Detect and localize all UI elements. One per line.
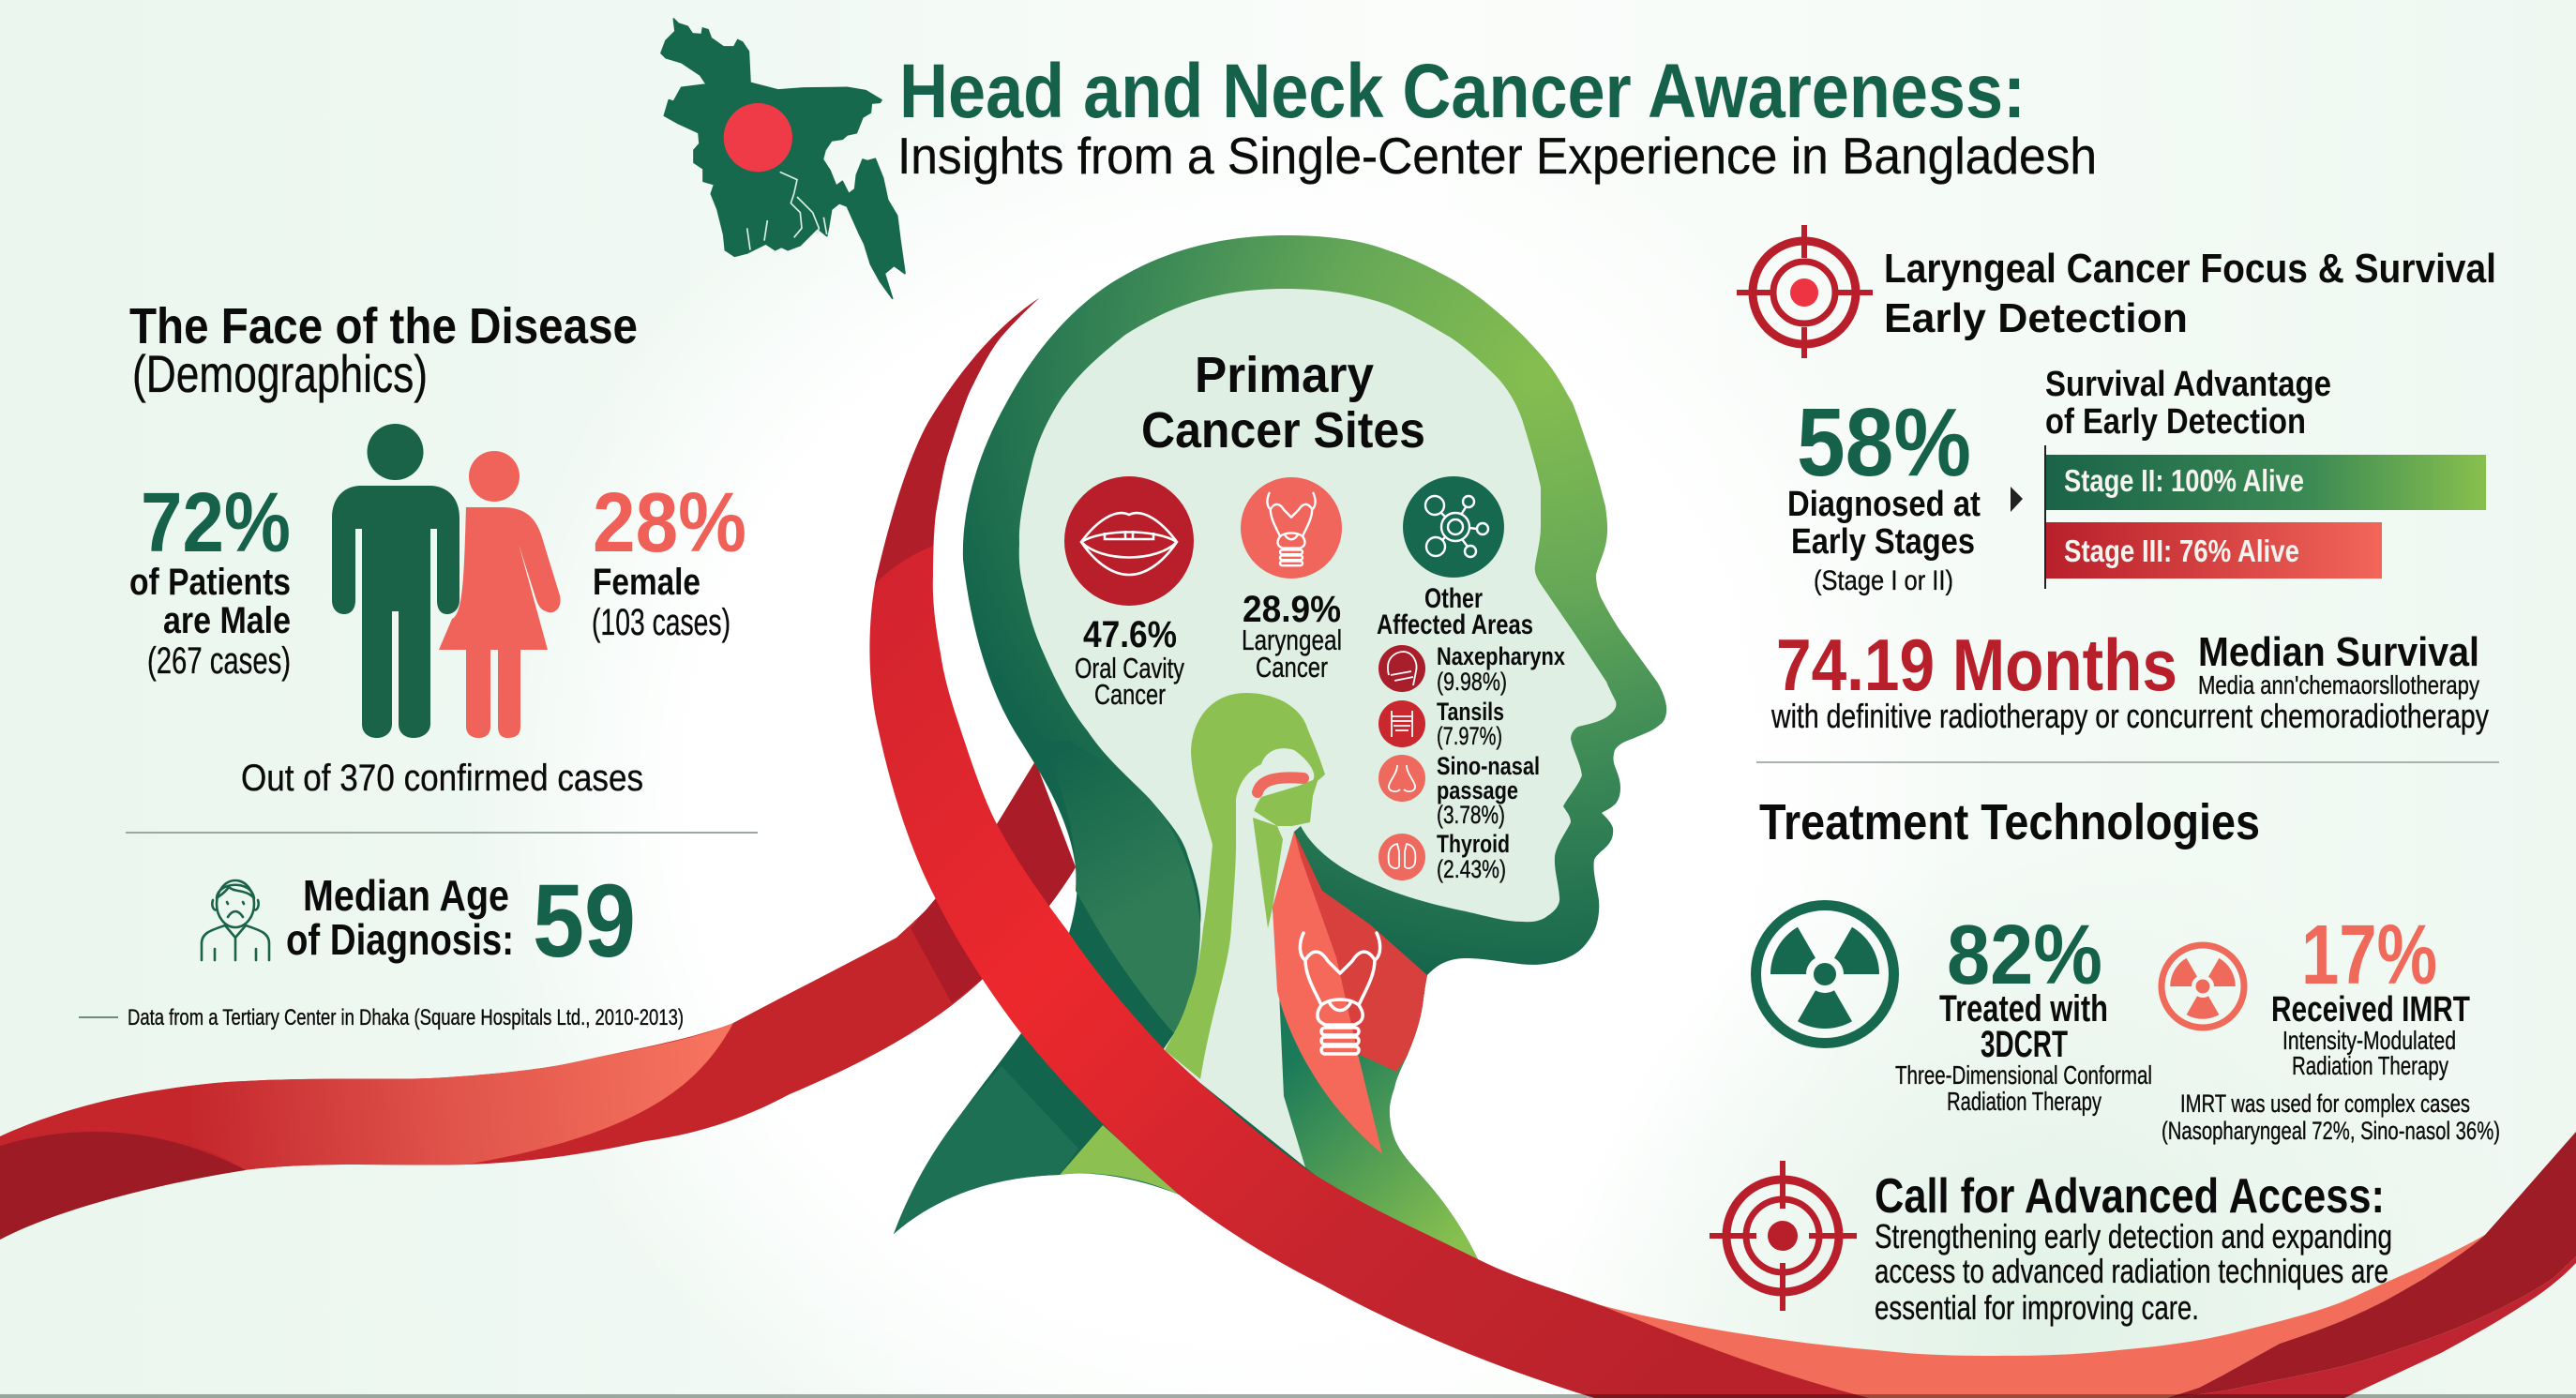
heading xyxy=(1141,347,1425,458)
heading: Cancer Sites xyxy=(1141,402,1425,458)
panel: primary cancer sites xyxy=(1064,347,1565,883)
bar chart xyxy=(2044,445,2486,589)
icon: male figure xyxy=(332,424,459,738)
median age xyxy=(286,864,636,979)
nasopharynx label xyxy=(1437,642,1565,696)
airway profile xyxy=(1165,693,1325,1079)
neck muscle xyxy=(1273,832,1427,1154)
head silhouette xyxy=(894,235,1666,1259)
icon: female figure xyxy=(439,451,561,738)
subtitle: Insights from a Single-Center Experience in Bangladesh xyxy=(897,127,2097,185)
median age: of Diagnosis: xyxy=(286,915,514,964)
heading: The Face of the Disease xyxy=(129,298,638,354)
panel: call for advanced access xyxy=(1710,1161,2392,1327)
icon: radiation green xyxy=(1755,906,1894,1043)
3DCRT statistic: 82% xyxy=(1947,909,2102,1002)
heading: Treatment Technologies xyxy=(1759,794,2260,850)
heading: Call for Advanced Access: xyxy=(1875,1169,2385,1224)
bar: stage III: Stage III: 76% Alive xyxy=(2064,534,2299,568)
icon: tonsils xyxy=(1378,700,1425,747)
icon: nasopharynx xyxy=(1378,645,1425,692)
male statistic: are Male xyxy=(163,600,291,641)
tonsils label xyxy=(1437,698,1504,750)
tonsils label: Tansils xyxy=(1437,698,1504,726)
female statistic: 28% xyxy=(593,476,746,570)
icon: radiation salmon xyxy=(2162,945,2244,1028)
salmon band xyxy=(1594,1235,2485,1398)
bottom right ribbon xyxy=(1594,1132,2576,1398)
oral cavity statistic: Cancer xyxy=(1094,678,1166,711)
data source: Data from a Tertiary Center in Dhaka (Square Hospitals Ltd., 2010-2013) xyxy=(128,1005,684,1030)
oral cavity statistic: Oral Cavity xyxy=(1075,652,1184,684)
back of neck xyxy=(1041,741,1200,1033)
oral cavity statistic xyxy=(1075,614,1184,711)
early stage statistic: Early Stages xyxy=(1791,522,1975,562)
survival advantage heading: Survival Advantage xyxy=(2045,365,2331,404)
icon: nose xyxy=(1378,755,1425,802)
3DCRT statistic: Radiation Therapy xyxy=(1947,1087,2101,1116)
female statistic: Female xyxy=(593,562,700,603)
laryngeal statistic: Laryngeal xyxy=(1242,624,1342,656)
oral cavity statistic: 47.6% xyxy=(1083,614,1177,655)
panel: treatment technologies xyxy=(1755,794,2500,1145)
panel: demographics xyxy=(79,298,758,1030)
male statistic: of Patients xyxy=(129,562,291,603)
3DCRT statistic xyxy=(1895,909,2152,1116)
IMRT statistic: Radiation Therapy xyxy=(2292,1051,2448,1080)
sino-nasal label: (3.78%) xyxy=(1437,801,1505,829)
IMRT note xyxy=(2162,1090,2500,1145)
bar: stage III xyxy=(2045,522,2382,579)
icon: larynx xyxy=(1300,933,1380,1054)
dark right band xyxy=(2167,1132,2576,1398)
other areas heading xyxy=(1377,583,1533,640)
body text: essential for improving care. xyxy=(1875,1288,2199,1327)
head interior xyxy=(1019,289,1616,1167)
early stage statistic: (Stage I or II) xyxy=(1814,565,1953,596)
sino-nasal label xyxy=(1437,752,1540,829)
sino-nasal label: Sino-nasal xyxy=(1437,752,1540,780)
male statistic: 72% xyxy=(141,476,291,570)
icon: target xyxy=(1737,225,1873,358)
icon: Bangladesh map xyxy=(661,19,905,298)
main awareness ribbon xyxy=(869,298,1869,1398)
3DCRT statistic: Three-Dimensional Conformal xyxy=(1895,1060,2152,1090)
ribbon dark tail xyxy=(875,298,1039,584)
ribbon dark crossing xyxy=(911,761,1076,1003)
heading: (Demographics) xyxy=(132,344,428,403)
thyroid label: Thyroid xyxy=(1437,830,1510,858)
other areas heading: Affected Areas xyxy=(1377,609,1533,640)
early stage statistic: 58% xyxy=(1797,388,1971,496)
laryngeal statistic: 28.9% xyxy=(1243,589,1341,630)
body text xyxy=(1875,1217,2392,1327)
shoulder xyxy=(894,1066,1078,1234)
survival advantage heading: of Early Detection xyxy=(2045,402,2306,442)
median survival: Media ann'chemaorsllotherapy xyxy=(2198,670,2479,699)
other areas heading: Other xyxy=(1424,583,1483,614)
icon: larynx circle xyxy=(1241,477,1342,579)
IMRT statistic: 17% xyxy=(2301,909,2437,1002)
heading: Laryngeal Cancer Focus & Survival xyxy=(1884,246,2496,292)
early stage statistic: Diagnosed at xyxy=(1787,485,1981,524)
IMRT note: IMRT was used for complex cases xyxy=(2180,1090,2470,1118)
shoulder highlight xyxy=(1060,1125,1179,1195)
heading xyxy=(129,298,638,403)
title: Head and Neck Cancer Awareness: xyxy=(899,49,2026,134)
median survival: Median Survival xyxy=(2198,629,2479,675)
female statistic: (103 cases) xyxy=(592,602,731,643)
left ribbon swoosh xyxy=(0,761,1076,1240)
title xyxy=(897,49,2097,185)
female statistic xyxy=(592,476,746,643)
arrow xyxy=(2011,487,2023,512)
3DCRT statistic: 3DCRT xyxy=(1981,1024,2068,1065)
heading: Primary xyxy=(1195,347,1374,403)
icon: network xyxy=(1403,476,1504,578)
3DCRT statistic: Treated with xyxy=(1939,988,2108,1030)
body text: Strengthening early detection and expanding xyxy=(1875,1217,2392,1255)
IMRT statistic: Received IMRT xyxy=(2271,990,2470,1030)
laryngeal statistic xyxy=(1242,589,1342,684)
total cases: Out of 370 confirmed cases xyxy=(241,758,643,799)
median age: Median Age xyxy=(303,871,509,920)
lower red band xyxy=(2167,1256,2576,1398)
icon: mouth xyxy=(1064,476,1194,606)
survival advantage heading xyxy=(2045,365,2331,442)
front of neck xyxy=(1275,975,1478,1259)
bar: stage II: Stage II: 100% Alive xyxy=(2064,463,2304,498)
tonsils label: (7.97%) xyxy=(1437,722,1502,750)
median survival xyxy=(1770,624,2489,735)
bar: stage II xyxy=(2045,455,2486,510)
ribbon salmon fold xyxy=(0,1023,733,1170)
median age: 59 xyxy=(533,864,636,979)
median survival: 74.19 Months xyxy=(1776,624,2177,706)
sino-nasal label: passage xyxy=(1437,776,1518,804)
IMRT statistic xyxy=(2271,909,2470,1080)
heading xyxy=(1884,246,2496,341)
male statistic xyxy=(129,476,291,682)
icon: patient xyxy=(202,880,269,960)
thyroid label xyxy=(1437,830,1510,883)
body text: access to advanced radiation techniques are xyxy=(1875,1252,2388,1290)
panel: laryngeal cancer focus xyxy=(1737,225,2499,763)
male statistic: (267 cases) xyxy=(147,640,291,682)
laryngeal statistic: Cancer xyxy=(1256,651,1328,684)
nasopharynx label: (9.98%) xyxy=(1437,668,1507,696)
heading: Early Detection xyxy=(1884,295,2188,341)
thyroid label: (2.43%) xyxy=(1437,855,1506,883)
icon: thyroid xyxy=(1378,834,1425,880)
icon: target xyxy=(1710,1161,1857,1311)
bottom edge bar xyxy=(0,1394,2576,1398)
ribbon dark end xyxy=(0,1132,246,1240)
early stage statistic xyxy=(1787,388,1981,596)
nasopharynx label: Naxepharynx xyxy=(1437,642,1565,670)
IMRT statistic: Intensity-Modulated xyxy=(2282,1026,2456,1055)
